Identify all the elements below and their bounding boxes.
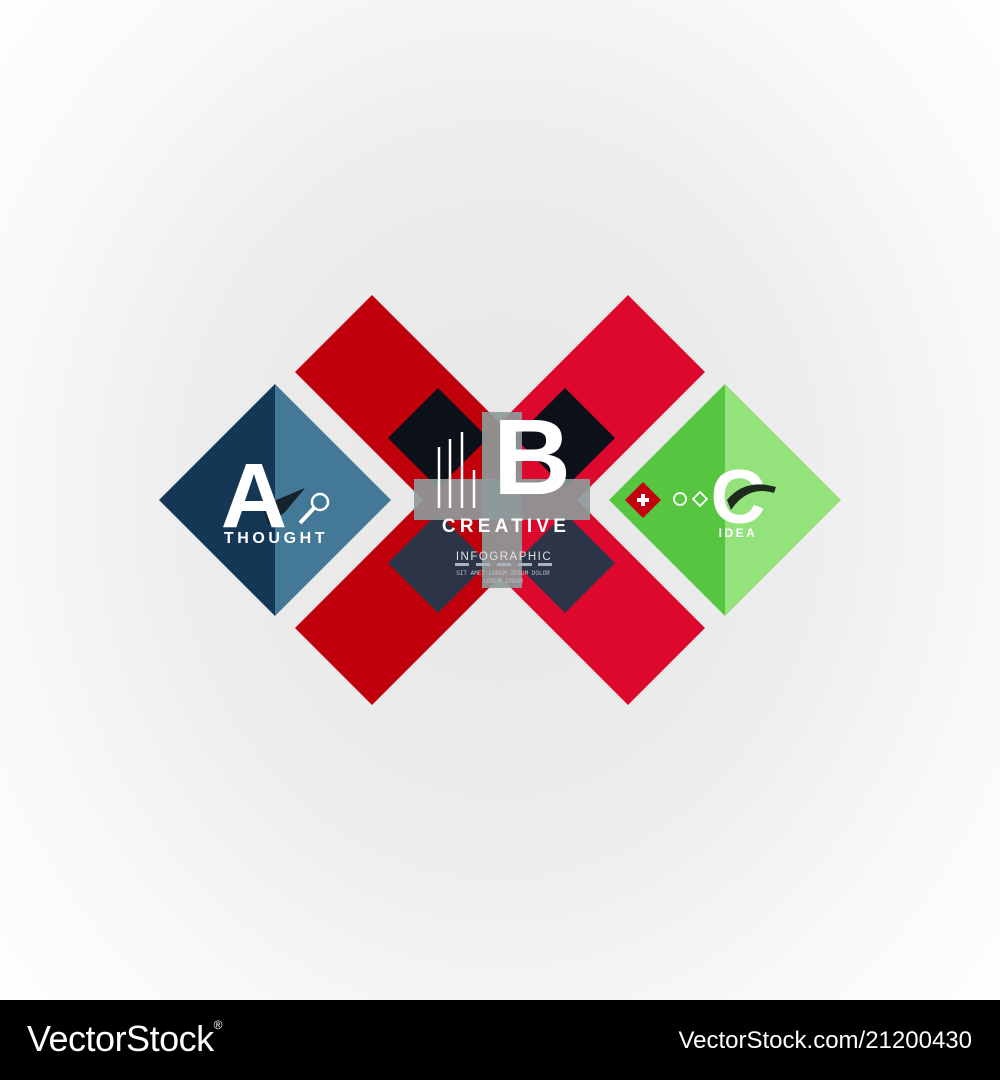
icon: magnifier	[300, 494, 328, 523]
footer logo text: VectorStock®	[27, 1018, 222, 1059]
diamond C	[609, 384, 841, 616]
diamond A	[159, 384, 391, 616]
letter B: B	[493, 396, 571, 517]
icon: circle and diamond	[674, 492, 707, 506]
letter A: A	[221, 445, 287, 547]
arrow shadow	[262, 488, 305, 525]
red X shape	[295, 295, 705, 705]
small body text: SIT AMET LOREM IPSUM DOLOR	[456, 570, 550, 577]
letter C: C	[711, 455, 765, 540]
footer bar	[0, 1000, 1000, 1080]
INFOGRAPHIC label: INFOGRAPHIC	[456, 551, 552, 563]
main graphic: LOREM IPSUM	[483, 578, 523, 585]
THOUGHT label: THOUGHT	[224, 530, 328, 547]
dark diamonds	[388, 388, 615, 613]
swoosh	[727, 484, 776, 510]
IDEA label: IDEA	[719, 526, 757, 540]
main graphic	[159, 295, 841, 705]
bar icon lines	[439, 432, 474, 508]
CREATIVE label: CREATIVE	[442, 516, 570, 537]
small bars	[455, 563, 552, 566]
footer id text: VectorStock.com/21200430	[678, 1027, 972, 1054]
gray cross	[414, 412, 590, 588]
icon: red diamond plus	[625, 482, 661, 518]
